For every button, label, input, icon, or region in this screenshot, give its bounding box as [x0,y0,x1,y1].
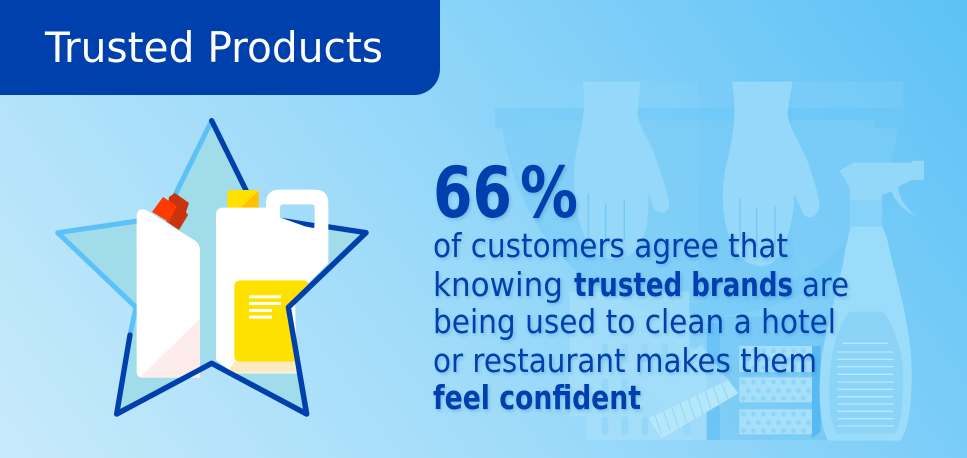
bucket [495,82,907,440]
line 1: of customers agree that [433,226,788,265]
left bottle cap [152,193,189,230]
statistic text block [433,152,849,417]
star outline dark segment [117,121,366,414]
are: are [802,265,849,304]
star with cleaning products [58,121,366,414]
jug label [234,280,309,362]
glove finger lines [588,193,775,247]
jug body [216,190,328,373]
star fill [58,121,366,414]
left bottle [137,209,200,378]
grater [569,292,707,440]
jug cap [227,190,259,208]
percent sign: % [520,152,578,234]
title: Trusted Products [44,23,383,72]
trusted brands: trusted brands [574,265,793,304]
66: 66 [433,152,512,234]
right glove [723,82,819,266]
faded background illustration: cleaning supplies [495,82,924,441]
scrub brush [640,345,738,438]
star front strokes [117,233,366,414]
sponges [739,346,821,438]
title tab [0,0,440,95]
spray bottle [820,161,924,441]
line 5: feel confident [433,378,641,417]
knowing: knowing [433,265,563,304]
line 4: or restaurant makes them [433,341,817,380]
left glove [574,82,669,259]
star outline light segment [58,121,212,335]
line 3: being used to clean a hotel [433,302,836,341]
